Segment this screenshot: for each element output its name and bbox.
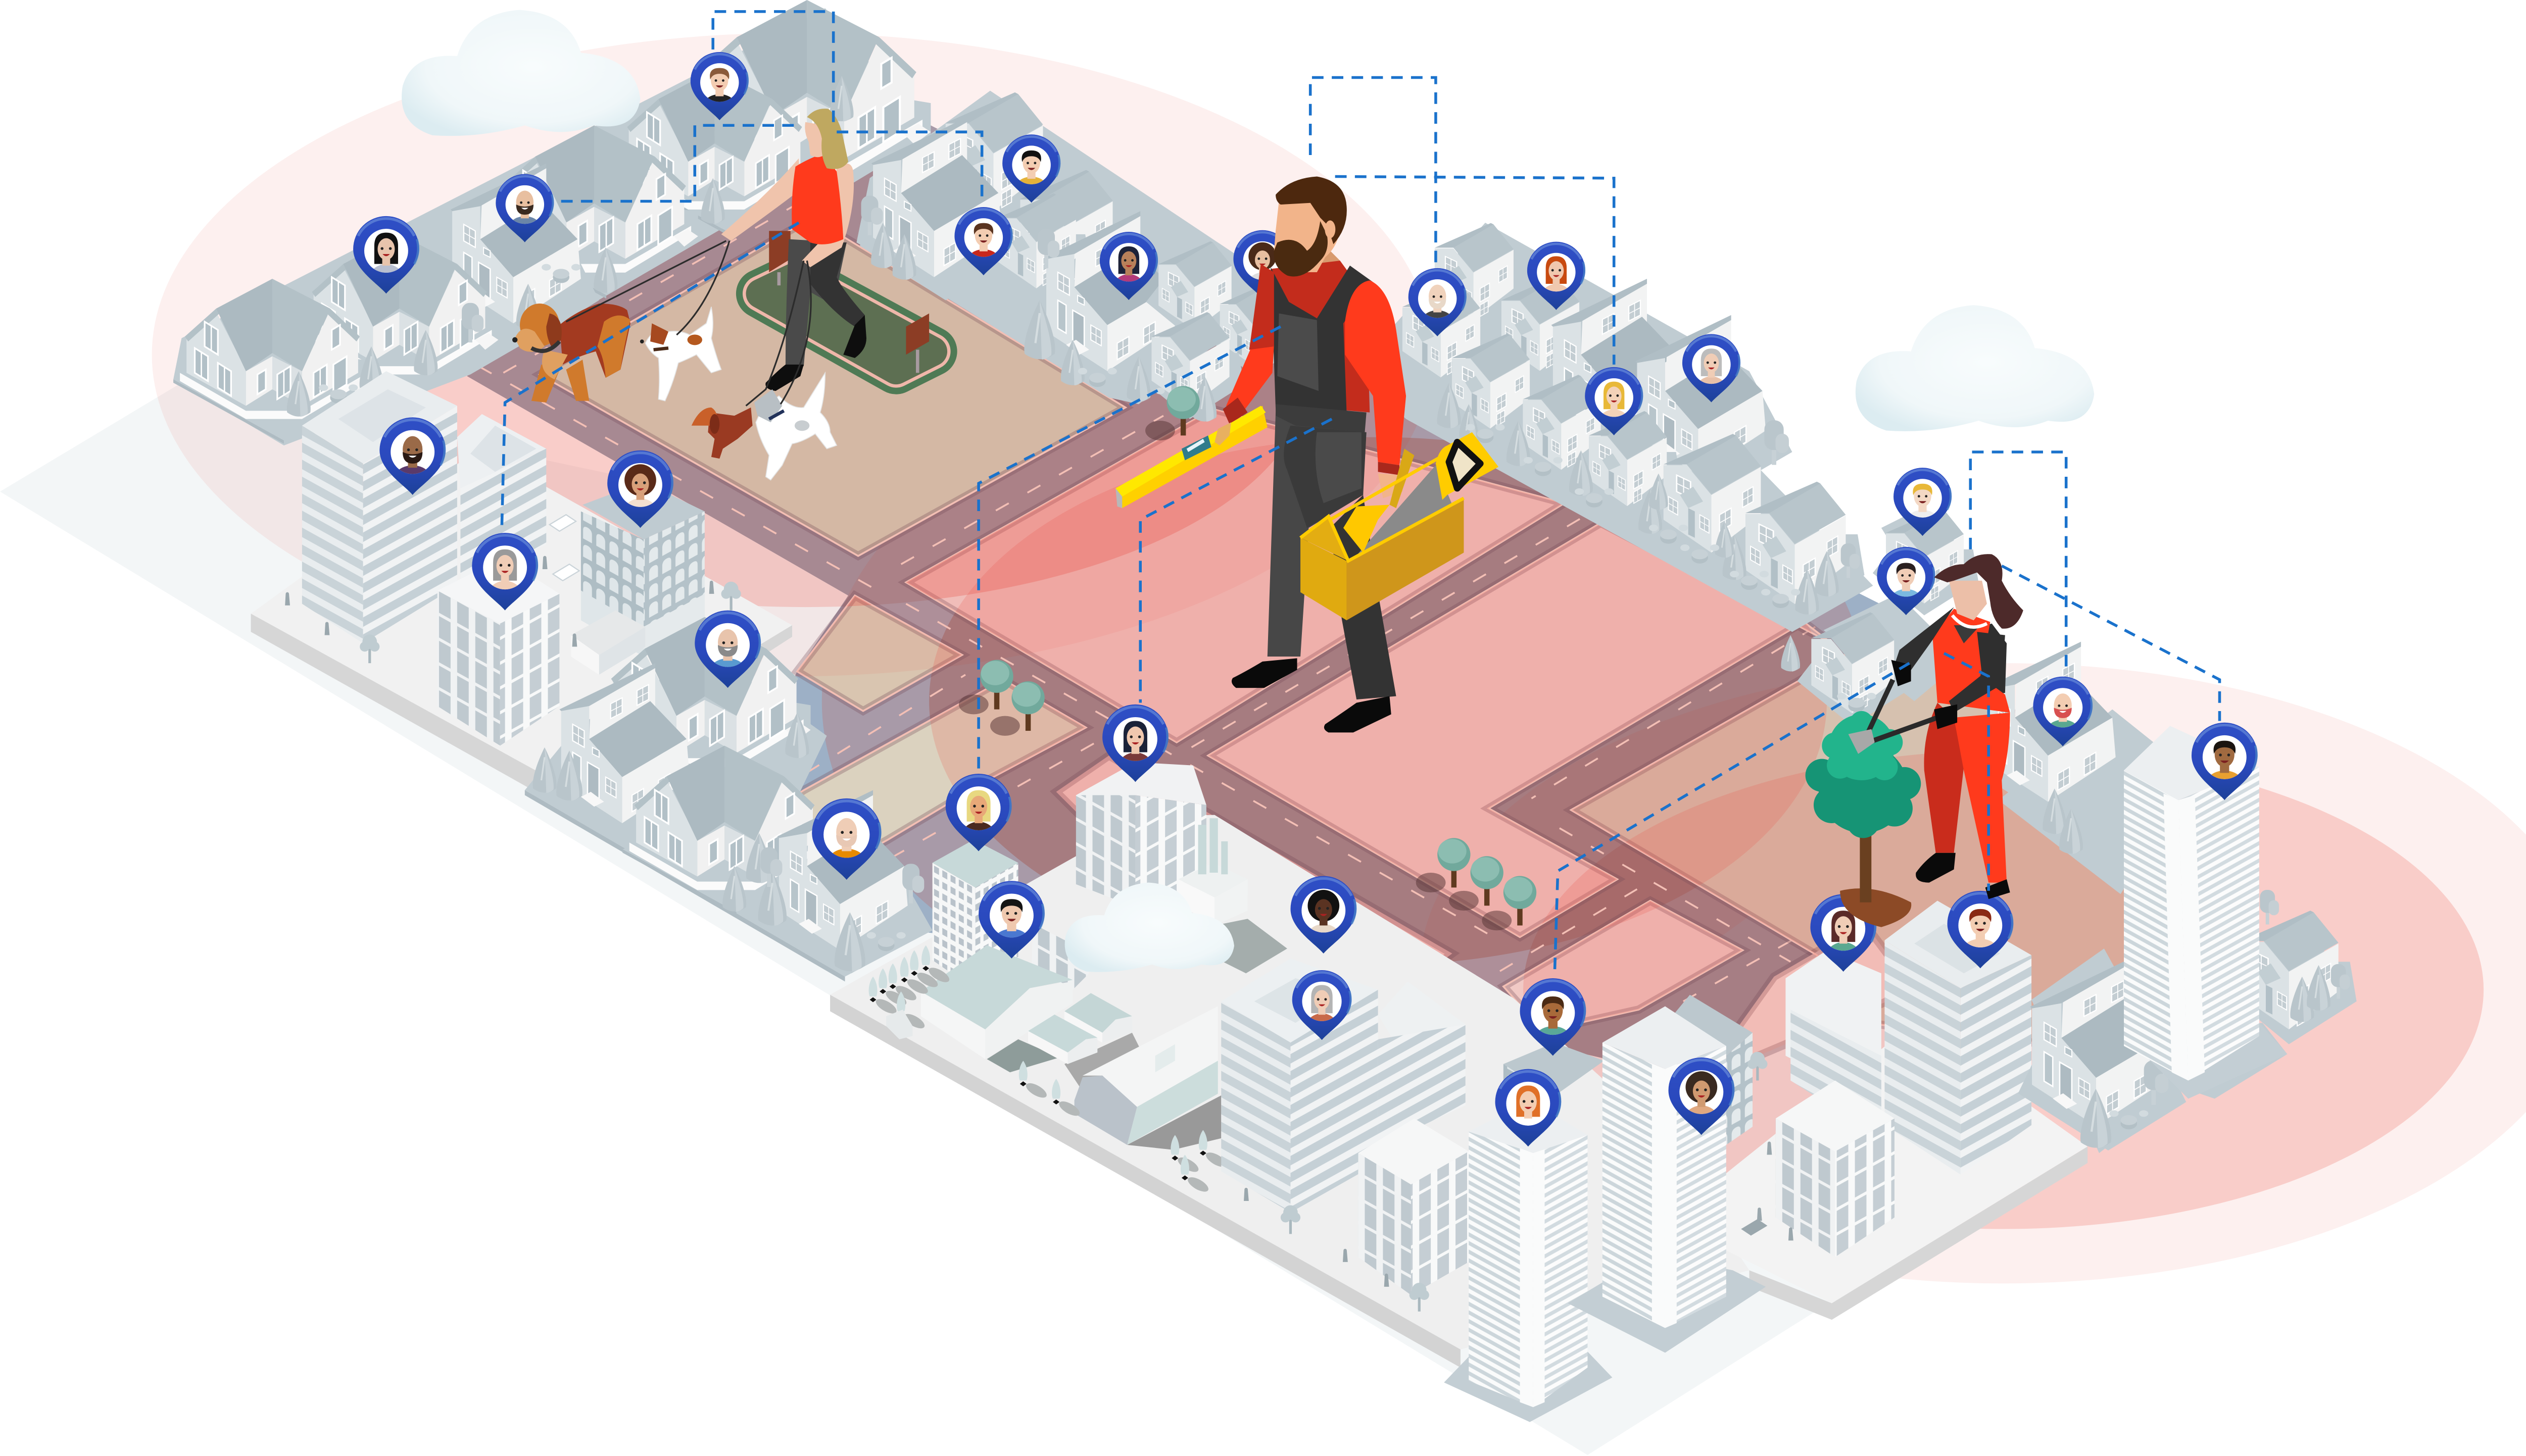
coverage zone: centre (822, 363, 1868, 1039)
park plot: dog walking area (531, 224, 1134, 561)
location pins: bottom blocks (1290, 677, 2258, 1146)
tower cluster: central block (1221, 959, 1469, 1312)
top left houses (173, 0, 931, 444)
cloud: top left (402, 10, 640, 136)
white factory office with chimneys (1032, 762, 1287, 990)
plinth: lower left housing blocks (525, 651, 933, 982)
land plots between the roads (791, 406, 2124, 1069)
road network (467, 125, 1879, 1069)
house cluster: lower left (533, 617, 926, 973)
figure: dachshund (692, 408, 753, 459)
coverage zone: right lobe (1419, 663, 2526, 1283)
dashed connector lines (502, 12, 2219, 977)
plinth: left city block (251, 448, 792, 797)
mint roof apartment (933, 840, 1018, 990)
location pins: back row (353, 52, 1952, 615)
brick blocks behind the towers (1503, 995, 1753, 1155)
tower cluster: left block (285, 371, 741, 745)
plinth: top left houses (173, 8, 914, 445)
tower cluster: lower right block (1741, 901, 2031, 1257)
hoop signs (769, 231, 929, 373)
figure: gardener (1849, 554, 2023, 899)
spirit level (1115, 406, 1268, 508)
small teal trees: junction pair (959, 660, 1045, 736)
location pins: left blocks (379, 417, 1169, 959)
northern house strip (860, 92, 1301, 422)
cloud: right (1856, 305, 2094, 431)
plinth: factory and tower block (830, 815, 1750, 1368)
north-eastern house strip (1389, 223, 1864, 619)
factory buildings (921, 945, 1221, 1150)
ground: pale isometric platform (0, 383, 2087, 1455)
figure: gardener's tree (1806, 711, 1921, 927)
small teal trees: north (1145, 386, 1200, 440)
parasols and trucks along the factory edge (869, 945, 1229, 1194)
figure: big brown dog (512, 304, 630, 403)
dog leashes (566, 241, 811, 406)
figure: white and brown terrier (640, 307, 721, 401)
tall tower: front left (1444, 1100, 1612, 1422)
houses: right side (2018, 890, 2357, 1150)
figure: tradesman (1223, 177, 1406, 732)
figure: white and grey dog (754, 373, 837, 480)
plinths: right housing plots (1824, 503, 2353, 1153)
plinth: northern house strip (856, 91, 1287, 404)
tall tower: front centre (1568, 1007, 1766, 1353)
road centre markings (478, 145, 1815, 1001)
houses near the gardener (1781, 509, 2134, 854)
plinth: lower right block (1667, 1023, 2087, 1320)
plinth: north-eastern house strip (1353, 223, 1873, 632)
toolbox with saw (1300, 432, 1498, 620)
cloud: centre (1065, 882, 1234, 972)
small teal trees: triple (1416, 838, 1536, 930)
coverage zone: left lobe (152, 33, 1432, 676)
tall tower: far right (2124, 726, 2287, 1098)
green running track (761, 277, 933, 370)
figure: woman walking dogs (721, 109, 866, 391)
